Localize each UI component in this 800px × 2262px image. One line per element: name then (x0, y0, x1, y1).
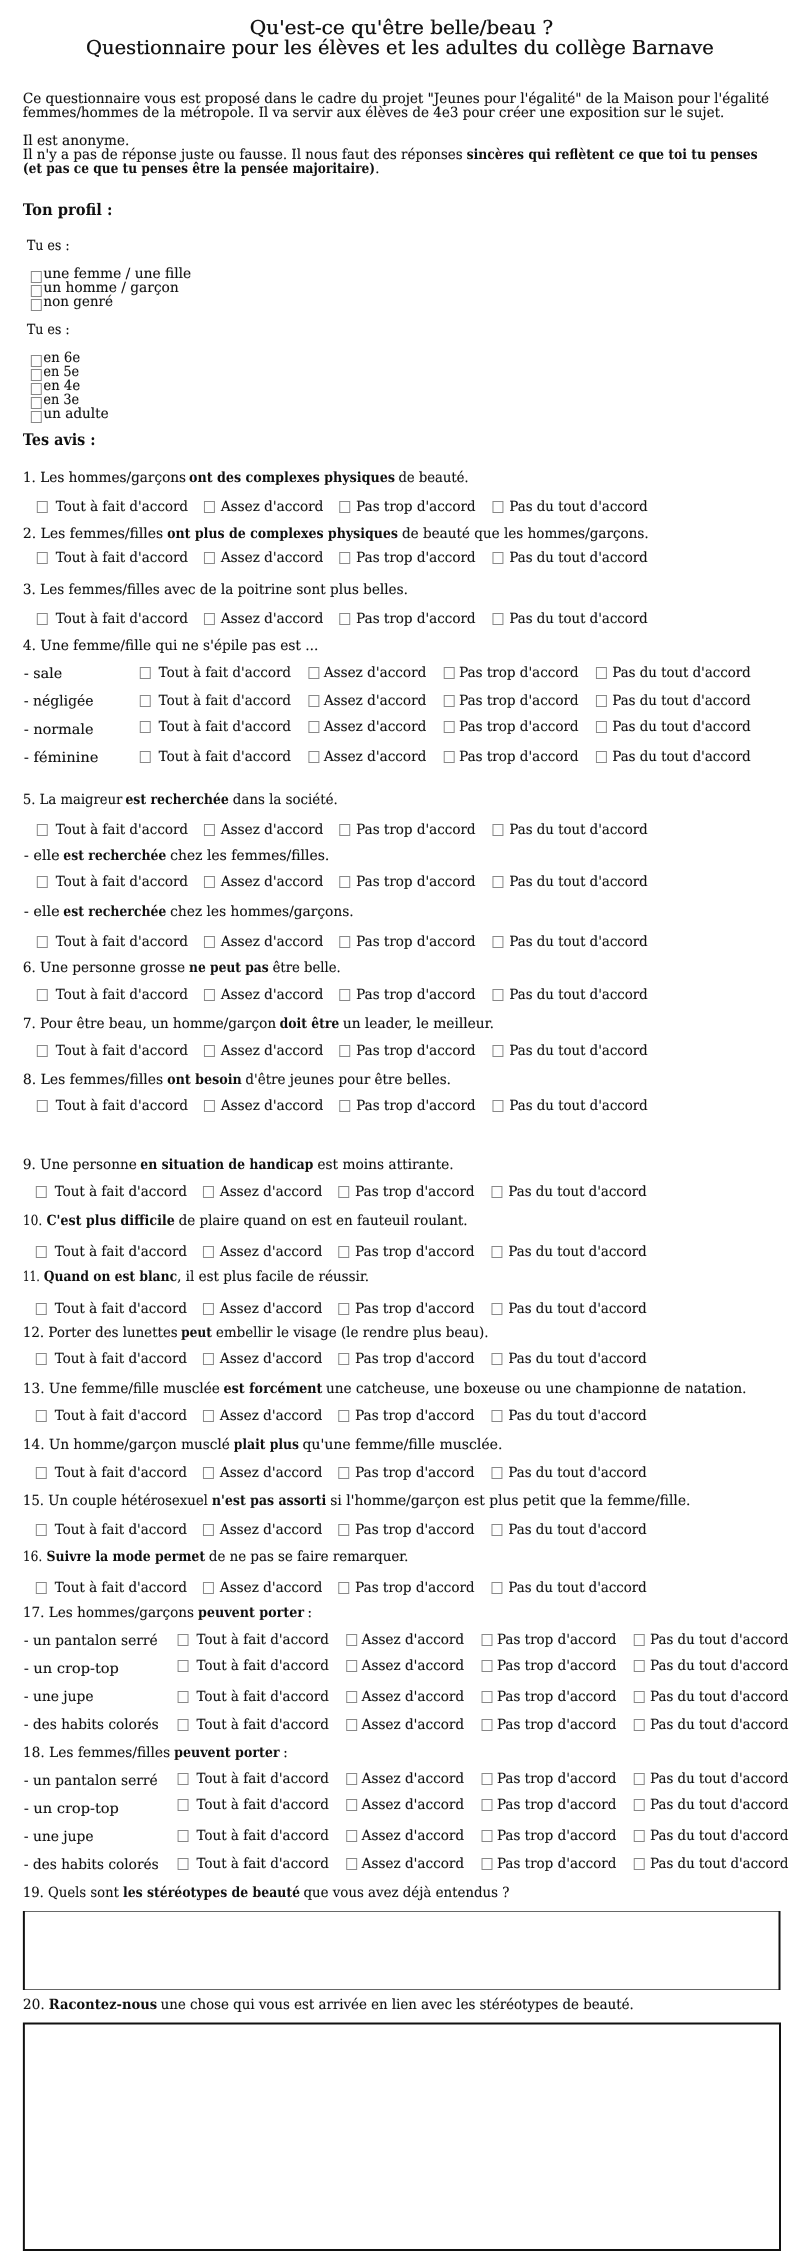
question 15: 15. Un couple hétérosexuel (23, 1493, 208, 1509)
answer row 14: Pas du tout d'accord (508, 1465, 647, 1481)
heading: Tes avis: Tes avis : (23, 430, 96, 449)
answer row: féminine: Pas du tout d'accord (612, 749, 751, 765)
answer row 5a: Assez d'accord (220, 874, 323, 890)
answer row 18a: Pas trop d'accord (497, 1771, 616, 1787)
introduction text: Ce questionnaire vous est proposé dans le cadre du projet "Jeunes pour l'égalité" de la Maison pour l'égalité (23, 91, 769, 107)
question 17: 17. Les hommes/garçons (23, 1605, 194, 1621)
answer row 7: Assez d'accord (220, 1043, 323, 1059)
answer row 17b: Tout à fait d'accord (196, 1658, 329, 1674)
answer row: négligée: Pas du tout d'accord (612, 693, 751, 709)
answer row 18b: Pas du tout d'accord (650, 1797, 788, 1813)
answer row 6: Pas trop d'accord (356, 987, 476, 1003)
question 5a: chez les femmes/filles. (170, 848, 329, 864)
answer row 2: Assez d'accord (220, 550, 323, 566)
answer row 11: Pas trop d'accord (355, 1301, 475, 1317)
answer row: normale: Tout à fait d'accord (159, 719, 291, 735)
answer row 13: Assez d'accord (219, 1408, 322, 1424)
answer row: sale: Tout à fait d'accord (159, 665, 291, 681)
question 5b (24, 904, 354, 920)
answer row 18b: Tout à fait d'accord (196, 1797, 329, 1813)
answer row 9: Tout à fait d'accord (55, 1184, 187, 1200)
introduction text: (et pas ce que tu penses être la pensée majoritaire) (23, 161, 375, 177)
question 20: une chose qui vous est arrivée en lien avec les stéréotypes de beauté. (161, 1997, 634, 2013)
answer row 17c: Pas du tout d'accord (650, 1689, 788, 1705)
question 16: Suivre la mode permet (46, 1549, 206, 1565)
answer row 11: Assez d'accord (219, 1301, 322, 1317)
answer row 11: Pas du tout d'accord (508, 1301, 647, 1317)
checkbox: en 5e (31, 364, 79, 380)
checkbox: un adulte: un adulte (43, 406, 109, 422)
answer row 18d: Pas trop d'accord (497, 1856, 616, 1872)
question 14: 14. Un homme/garçon musclé (23, 1437, 230, 1453)
answer row 6 (37, 987, 648, 1003)
answer row 5: Assez d'accord (220, 822, 323, 838)
question 14: qu'une femme/fille musclée. (302, 1437, 502, 1453)
checkbox: non genre: non genré (43, 294, 113, 310)
introduction text: Il n'y a pas de réponse juste ou fausse. Il nous faut des réponses (23, 147, 463, 163)
question 5: dans la société. (233, 792, 338, 808)
answer row 13: Tout à fait d'accord (55, 1408, 187, 1424)
answer row 18c: Pas du tout d'accord (650, 1828, 788, 1844)
answer row 17a: Pas trop d'accord (497, 1632, 616, 1648)
question 18: : (283, 1745, 288, 1761)
question 16 (23, 1549, 408, 1565)
question 18: 18. Les femmes/filles (23, 1745, 170, 1761)
question 6 (23, 960, 341, 976)
answer row 6: Tout à fait d'accord (56, 987, 188, 1003)
answer row 8 (37, 1098, 648, 1114)
answer row 17b: Pas du tout d'accord (650, 1658, 788, 1674)
checkbox: une femme: une femme / une fille (43, 266, 191, 282)
checkbox: en 4e: en 4e (43, 378, 80, 394)
label: sale: - sale (24, 666, 62, 682)
answer row 18b: Pas trop d'accord (497, 1797, 616, 1813)
answer row 18d (178, 1856, 788, 1872)
answer row 17d: Assez d'accord (361, 1717, 464, 1733)
answer row 18c: Pas trop d'accord (497, 1828, 616, 1844)
answer row 11 (36, 1301, 647, 1317)
answer row 5b: Assez d'accord (220, 934, 323, 950)
introduction text: femmes/hommes de la métropole. Il va servir aux élèves de 4e3 pour créer une exposition sur le sujet. (23, 105, 724, 121)
answer row 1: Pas trop d'accord (356, 499, 476, 515)
question 15: si l'homme/garçon est plus petit que la femme/fille. (330, 1493, 690, 1509)
answer row 8: Assez d'accord (220, 1098, 323, 1114)
question 13: une catcheuse, une boxeuse ou une championne de natation. (326, 1381, 746, 1397)
answer row 5 (37, 822, 648, 838)
question 2: de beauté que les hommes/garçons. (402, 526, 649, 542)
answer row 7: Tout à fait d'accord (56, 1043, 188, 1059)
answer row 10: Pas trop d'accord (355, 1244, 475, 1260)
answer row: négligée: Tout à fait d'accord (159, 693, 291, 709)
heading: Ton profil: Ton profil : (23, 200, 112, 219)
answer row 13: Pas du tout d'accord (508, 1408, 647, 1424)
answer row 14: Assez d'accord (219, 1465, 322, 1481)
answer row: normale: Assez d'accord (323, 719, 426, 735)
answer row 18b: Assez d'accord (361, 1797, 464, 1813)
answer row 12: Pas trop d'accord (355, 1351, 475, 1367)
question 5 (23, 792, 338, 808)
question 14: plait plus (234, 1437, 299, 1453)
answer row: négligée: Assez d'accord (323, 693, 426, 709)
answer row 3: Tout à fait d'accord (56, 611, 188, 627)
answer row: normale (140, 719, 751, 735)
question 5b: est recherchée (63, 904, 166, 920)
label: une jupe: - une jupe (24, 1689, 94, 1705)
question 8: d'être jeunes pour être belles. (245, 1072, 451, 1088)
question 9: 9. Une personne (23, 1157, 137, 1173)
answer row 14 (36, 1465, 647, 1481)
answer row 5b: Pas du tout d'accord (509, 934, 648, 950)
label: un pantalon serré: - un pantalon serré (24, 1633, 158, 1649)
answer row 5: Tout à fait d'accord (56, 822, 188, 838)
answer row 3: Pas du tout d'accord (509, 611, 648, 627)
answer row 9: Assez d'accord (219, 1184, 322, 1200)
answer row 1 (37, 499, 648, 515)
answer row 9: Pas trop d'accord (355, 1184, 475, 1200)
answer row 12: Tout à fait d'accord (55, 1351, 187, 1367)
question 5a (24, 848, 329, 864)
question 19 (23, 1885, 509, 1901)
answer row 17a (178, 1632, 788, 1648)
checkbox: en 3e: en 3e (43, 392, 79, 408)
checkbox: en 6e: en 6e (43, 350, 80, 366)
answer row 6: Pas du tout d'accord (509, 987, 648, 1003)
answer row 18a: Assez d'accord (361, 1771, 464, 1787)
answer row 8: Pas du tout d'accord (509, 1098, 648, 1114)
answer row 18a (178, 1771, 788, 1787)
question 16: 16. (23, 1549, 42, 1565)
answer row 17b (178, 1658, 788, 1674)
answer row 17a: Tout à fait d'accord (196, 1632, 329, 1648)
answer row 5a (37, 874, 648, 890)
answer box 20 (24, 2024, 780, 2250)
question 16: de ne pas se faire remarquer. (209, 1549, 408, 1565)
question 2: 2. Les femmes/filles (23, 526, 163, 542)
answer row 12: Assez d'accord (219, 1351, 322, 1367)
question 5b: chez les hommes/garçons. (170, 904, 354, 920)
answer row: normale: Pas trop d'accord (459, 719, 579, 735)
answer row 2: Pas trop d'accord (356, 550, 476, 566)
answer row 10 (36, 1244, 647, 1260)
label: un crop-top: - un crop-top (24, 1661, 119, 1677)
answer row 5a: Pas du tout d'accord (509, 874, 648, 890)
answer row 12 (36, 1351, 647, 1367)
question 7: doit être (280, 1016, 339, 1032)
question 5a: est recherchée (63, 848, 166, 864)
question 8: ont besoin (167, 1072, 242, 1088)
question 6: ne peut pas (189, 960, 269, 976)
answer row 8: Pas trop d'accord (356, 1098, 476, 1114)
question 11: 11. (23, 1269, 40, 1285)
answer row 10: Assez d'accord (219, 1244, 322, 1260)
question 5a: - elle (24, 848, 60, 864)
answer row 7: Pas du tout d'accord (509, 1043, 648, 1059)
question 11: , il est plus facile de réussir. (177, 1269, 369, 1285)
label: une jupe: - une jupe (24, 1829, 94, 1845)
question 15 (23, 1493, 690, 1509)
question 13: est forcément (223, 1381, 323, 1397)
answer row 17c: Assez d'accord (361, 1689, 464, 1705)
answer row 18b (178, 1797, 788, 1813)
answer row: sale: Pas trop d'accord (459, 665, 579, 681)
answer row 18d: Assez d'accord (361, 1856, 464, 1872)
label: normale: - normale (24, 722, 94, 738)
answer row 16 (36, 1580, 647, 1596)
question 17 (23, 1605, 312, 1621)
question 5: 5. La maigreur (23, 792, 123, 808)
answer row 17c: Tout à fait d'accord (196, 1689, 329, 1705)
answer row 17d (178, 1717, 788, 1733)
answer row 5b: Tout à fait d'accord (56, 934, 188, 950)
answer row 17a: Pas du tout d'accord (650, 1632, 788, 1648)
answer row 14: Tout à fait d'accord (55, 1465, 187, 1481)
question 6: être belle. (273, 960, 341, 976)
answer box 19 (23, 1911, 780, 1990)
question 12: 12. Porter des lunettes (23, 1325, 178, 1341)
introduction text: . (375, 161, 380, 177)
question: classe: Tu es : (27, 322, 70, 338)
question 5b: - elle (24, 904, 60, 920)
answer row 16: Assez d'accord (219, 1580, 322, 1596)
question 10: de plaire quand on est en fauteuil roulant. (179, 1213, 468, 1229)
answer row 18c: Tout à fait d'accord (196, 1828, 329, 1844)
answer row 15: Assez d'accord (219, 1522, 322, 1538)
question 9: en situation de handicap (140, 1157, 314, 1173)
question 19: que vous avez déjà entendus ? (303, 1885, 509, 1901)
question 4: 4. Une femme/fille qui ne s'épile pas est ... (23, 638, 318, 654)
answer row 18a: Tout à fait d'accord (196, 1771, 329, 1787)
question 20: Racontez-nous (49, 1997, 157, 2013)
answer row 10: Tout à fait d'accord (55, 1244, 187, 1260)
question 13 (23, 1381, 746, 1397)
question 19: 19. Quels sont (23, 1885, 119, 1901)
question 1: 1. Les hommes/garçons (23, 470, 186, 486)
answer row 17c: Pas trop d'accord (497, 1689, 616, 1705)
answer row 14: Pas trop d'accord (355, 1465, 475, 1481)
answer row 3: Assez d'accord (220, 611, 323, 627)
label: un crop-top: - un crop-top (24, 1801, 119, 1817)
answer row 1: Pas du tout d'accord (509, 499, 648, 515)
answer row 17b: Pas trop d'accord (497, 1658, 616, 1674)
question 2 (23, 526, 649, 542)
question 12: peut (181, 1325, 212, 1341)
title: Questionnaire pour les élèves et les adultes du collège Barnave (86, 37, 714, 59)
question 13: 13. Une femme/fille musclée (23, 1381, 220, 1397)
question 9: est moins attirante. (317, 1157, 454, 1173)
answer row 18c (178, 1828, 788, 1844)
checkbox: un homme: un homme / garçon (43, 280, 179, 296)
label: un pantalon serré: - un pantalon serré (24, 1773, 158, 1789)
answer row 11: Tout à fait d'accord (55, 1301, 187, 1317)
question 8: 8. Les femmes/filles (23, 1072, 163, 1088)
question 12 (23, 1325, 488, 1341)
question: genre: Tu es : (27, 238, 70, 254)
checkbox: en 5e: en 5e (43, 364, 79, 380)
answer row 10: Pas du tout d'accord (508, 1244, 647, 1260)
answer row: féminine: Assez d'accord (323, 749, 426, 765)
answer row 1: Tout à fait d'accord (56, 499, 188, 515)
title: Qu'est-ce qu'être belle/beau ? (250, 17, 553, 39)
answer row: féminine: Tout à fait d'accord (159, 749, 291, 765)
question 10 (23, 1213, 468, 1229)
answer row 16: Pas du tout d'accord (508, 1580, 647, 1596)
answer row 16: Pas trop d'accord (355, 1580, 475, 1596)
answer row 13: Pas trop d'accord (355, 1408, 475, 1424)
answer row: sale: Assez d'accord (323, 665, 426, 681)
answer row 5: Pas trop d'accord (356, 822, 476, 838)
answer row 2: Tout à fait d'accord (56, 550, 188, 566)
question 1: ont des complexes physiques (189, 470, 395, 486)
answer row 15 (36, 1522, 647, 1538)
question 10: 10. (23, 1213, 42, 1229)
answer row 17c (178, 1689, 788, 1705)
question 11 (23, 1269, 369, 1285)
answer row 17a: Assez d'accord (361, 1632, 464, 1648)
answer row 9: Pas du tout d'accord (508, 1184, 647, 1200)
answer row: sale (140, 665, 751, 681)
answer row: négligée (140, 693, 751, 709)
answer row 5b: Pas trop d'accord (356, 934, 476, 950)
answer row 15: Pas du tout d'accord (508, 1522, 647, 1538)
answer row 6: Assez d'accord (220, 987, 323, 1003)
title (86, 17, 714, 59)
answer row 2: Pas du tout d'accord (509, 550, 648, 566)
answer row 17d: Pas trop d'accord (497, 1717, 616, 1733)
answer row 5a: Pas trop d'accord (356, 874, 476, 890)
answer row 17b: Assez d'accord (361, 1658, 464, 1674)
question 1 (23, 470, 469, 486)
question 10: C'est plus difficile (46, 1213, 175, 1229)
question 18 (23, 1745, 288, 1761)
answer row 16: Tout à fait d'accord (55, 1580, 187, 1596)
label: des habits colorés: - des habits colorés (24, 1857, 159, 1873)
label: négligée: - négligée (24, 694, 94, 710)
answer row 18d: Pas du tout d'accord (650, 1856, 788, 1872)
answer row 7: Pas trop d'accord (356, 1043, 476, 1059)
label: féminine: - féminine (24, 750, 98, 766)
answer row: féminine (140, 749, 751, 765)
question 5: est recherchée (125, 792, 229, 808)
question 14 (23, 1437, 502, 1453)
introduction text (23, 91, 769, 177)
answer row 18d: Tout à fait d'accord (196, 1856, 329, 1872)
answer row 1: Assez d'accord (220, 499, 323, 515)
question 6: 6. Une personne grosse (23, 960, 185, 976)
question 1: de beauté. (398, 470, 469, 486)
answer row 17d: Pas du tout d'accord (650, 1717, 788, 1733)
answer row 3 (37, 611, 648, 627)
question 2: ont plus de complexes physiques (167, 526, 398, 542)
question 17: : (307, 1605, 312, 1621)
answer row 18a: Pas du tout d'accord (650, 1771, 788, 1787)
answer row 15: Pas trop d'accord (355, 1522, 475, 1538)
answer row 2 (37, 550, 648, 566)
question 11: Quand on est blanc (44, 1269, 177, 1285)
answer row 17d: Tout à fait d'accord (196, 1717, 329, 1733)
introduction text: Il est anonyme. (23, 133, 129, 149)
answer row 7 (37, 1043, 648, 1059)
question 8 (23, 1072, 451, 1088)
answer row: négligée: Pas trop d'accord (459, 693, 579, 709)
label: des habits colorés: - des habits colorés (24, 1717, 159, 1733)
question 18: peuvent porter (174, 1745, 280, 1761)
answer row 15: Tout à fait d'accord (55, 1522, 187, 1538)
answer row 5: Pas du tout d'accord (509, 822, 648, 838)
answer row 13 (36, 1408, 647, 1424)
question 17: peuvent porter (198, 1605, 305, 1621)
question 12: embellir le visage (le rendre plus beau). (216, 1325, 488, 1341)
answer row 12: Pas du tout d'accord (508, 1351, 647, 1367)
question 20: 20. (23, 1997, 45, 2013)
question 19: les stéréotypes de beauté (123, 1885, 300, 1901)
question 7: 7. Pour être beau, un homme/garçon (23, 1016, 276, 1032)
answer row: sale: Pas du tout d'accord (612, 665, 751, 681)
question 3: 3. Les femmes/filles avec de la poitrine sont plus belles. (23, 582, 408, 598)
answer row: féminine: Pas trop d'accord (459, 749, 579, 765)
answer row 9 (36, 1184, 647, 1200)
question 7 (23, 1016, 494, 1032)
question 9 (23, 1157, 454, 1173)
answer row: normale: Pas du tout d'accord (612, 719, 751, 735)
answer row 18c: Assez d'accord (361, 1828, 464, 1844)
question 7: un leader, le meilleur. (343, 1016, 494, 1032)
introduction text: sincères qui reflètent ce que toi tu penses (467, 147, 758, 163)
checkbox: en 3e (31, 392, 79, 408)
answer row 5a: Tout à fait d'accord (56, 874, 188, 890)
panel: profil (27, 238, 191, 422)
answer row 3: Pas trop d'accord (356, 611, 476, 627)
answer row 5b (37, 934, 648, 950)
question 15: n'est pas assorti (212, 1493, 326, 1509)
answer row 8: Tout à fait d'accord (56, 1098, 188, 1114)
